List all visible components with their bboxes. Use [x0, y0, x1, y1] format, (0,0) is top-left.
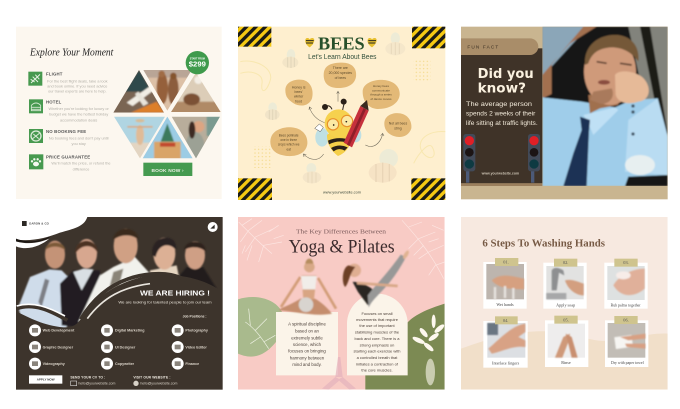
- price badge: START FROM: [190, 57, 205, 60]
- illustration: bee with pencil: [315, 99, 369, 156]
- hands decoration: [322, 357, 356, 390]
- fact bubble: sting: sting: [394, 126, 402, 130]
- step 04: 04.: [503, 318, 508, 323]
- text card: pilates: a controlled breath that: [357, 355, 398, 360]
- text card: yoga: [276, 312, 338, 375]
- photo triangle: statue and bag: [142, 116, 193, 159]
- icon: heart bee right: [368, 38, 377, 47]
- text card: yoga: based on an: [295, 329, 320, 334]
- heading: we are hiring: WE ARE HIRING !: [140, 288, 210, 297]
- feature: price guarantee: PRICE GUARANTEE: [46, 154, 90, 159]
- floral decoration: top corners: [239, 219, 445, 279]
- contact: website: VISIT OUR WEBSITE :: [133, 376, 171, 380]
- fact bubble: pollinate: one in three: [280, 138, 297, 142]
- heading: Did you know: Did you: [478, 67, 534, 82]
- text card: pilates: stabilising muscles of the: [355, 330, 400, 335]
- text card: yoga: A spiritual discipline: [288, 322, 326, 327]
- swoosh lines: [17, 274, 187, 320]
- fact bubble: dance: [363, 80, 400, 109]
- step 05: [545, 316, 588, 367]
- fact bubble: species: [324, 63, 356, 88]
- panel: Bees: [238, 27, 445, 200]
- panel: 6 steps to washing hands: [461, 217, 668, 390]
- fact bubble: pollinate: eat: [286, 147, 291, 151]
- contact: website: hello@yourwebsite.com: [140, 382, 177, 386]
- subheading: We are looking for talented people to join our team: [118, 299, 212, 304]
- step 05: 05.: [563, 317, 569, 322]
- header swoosh: [16, 217, 87, 248]
- photo: pilates woman: [343, 250, 410, 308]
- photo triangle: smiling woman: [171, 116, 222, 160]
- step 06: [605, 316, 648, 367]
- button: book now: [143, 163, 192, 176]
- panel: travel Explore Your Moment: [16, 27, 222, 199]
- photo triangle: luggage: [171, 74, 220, 112]
- feature: price guarantee: difference: [73, 167, 89, 171]
- feature: flight: [28, 71, 108, 93]
- step 04: [483, 316, 528, 368]
- heading: Explore Your Moment: Explore Your Moment: [29, 46, 114, 58]
- fact bubble: honey: food: [295, 99, 302, 103]
- fact bubble: species: 20,000 species: [329, 71, 352, 75]
- step 03: 03.: [623, 260, 629, 265]
- fact bubble: honey: [285, 80, 313, 106]
- website: www.yourwebsite.com: [481, 172, 519, 176]
- panel: Did you know fun fact: [461, 27, 668, 199]
- pill: fun fact: FUN FACT: [467, 45, 499, 50]
- contact: website: [133, 376, 177, 386]
- text card: yoga: extremely subtle: [291, 335, 323, 340]
- feature: price guarantee: We'll match the price, or refund the: [51, 162, 111, 166]
- pill: fun fact: [461, 38, 538, 55]
- step 04: Interlace fingers: [492, 361, 520, 366]
- feature: flight: FLIGHT: [46, 71, 63, 76]
- text card: yoga: mind and body.: [292, 362, 322, 367]
- feature: hotel: Whether you're looking for luxury or: [49, 107, 110, 111]
- button: book now: BOOK NOW ›: [152, 168, 184, 174]
- step 02: 02.: [563, 260, 568, 265]
- job list: Finance: [185, 362, 199, 366]
- photo: team: [18, 229, 217, 329]
- feature: hotel: accommodation deals: [60, 118, 97, 122]
- logo: [22, 221, 50, 226]
- fact text: The average person: [466, 101, 533, 108]
- text card: pilates: movements that require: [356, 317, 399, 322]
- icon: heart bee left: [305, 38, 314, 47]
- fact bubble: dance: through a series: [370, 93, 392, 97]
- heading: Did you know: know?: [478, 82, 526, 97]
- green blob left: [238, 297, 284, 357]
- job list: Photography: [185, 329, 209, 333]
- fact bubble: honey: winter: [294, 95, 304, 99]
- step 02: [543, 259, 587, 309]
- feature: flight: our travel experts are here to help.: [48, 89, 107, 93]
- heading: 6 Steps To Washing Hands: [482, 238, 605, 249]
- feature: hotel: budget we have the hottest holiday: [49, 113, 108, 117]
- website: www.yourwebsite.com: [323, 190, 361, 194]
- wave background: [461, 331, 668, 390]
- fact bubble: dance: communicate: [372, 88, 390, 92]
- icon: traffic light left: [463, 134, 475, 183]
- leaves on right blob: [412, 315, 445, 385]
- icon: traffic light right: [528, 134, 540, 183]
- feature: hotel: HOTEL: [46, 99, 62, 104]
- step 05: Rinse: [561, 360, 571, 365]
- heading: The Key Differences Between: [296, 229, 387, 236]
- step 01: [483, 258, 527, 309]
- text card: pilates: strong emphasis on: [360, 342, 394, 347]
- panel: We are hiring: [16, 217, 223, 390]
- photo triangle: couple: [144, 70, 190, 110]
- text card: pilates: initiates a contraction of: [356, 361, 399, 366]
- fact text: life sitting at traffic lights.: [466, 120, 538, 127]
- logo: GARON & CO: [29, 222, 50, 226]
- photo triangle: plane: [114, 70, 164, 113]
- job list: Digital Marketing: [115, 329, 144, 333]
- step 01: Wet hands: [496, 302, 514, 307]
- contact: email: SEND YOUR CV TO :: [70, 376, 105, 380]
- job list: UI Designer: [115, 345, 136, 349]
- button: apply now: APPLY NOW: [37, 378, 55, 382]
- text card: yoga: focuses on bringing: [288, 349, 326, 354]
- fact bubble: pollinate: Bees pollinate: [279, 133, 299, 137]
- step 06: 06.: [623, 318, 629, 323]
- subheading: Let's Learn About Bees: [308, 54, 377, 61]
- feature: no booking fee: you stay: [72, 142, 86, 146]
- text card: pilates: starting each exercise with: [354, 349, 400, 354]
- heading: BEES: [305, 34, 377, 54]
- job list: [29, 324, 209, 370]
- hazard stripes: corners: [238, 27, 445, 200]
- photo: yoga woman: [279, 259, 336, 315]
- text card: pilates: the use of important: [359, 323, 395, 328]
- fact bubble: pollinate: [270, 127, 307, 156]
- button: apply now: [29, 375, 62, 384]
- job list: Graphic Designer: [43, 345, 74, 349]
- fact bubble: honey: bees': [295, 90, 303, 94]
- fact bubble: honey: Honey is: [292, 85, 306, 89]
- job list: Web Development: [43, 329, 75, 333]
- contact: email: hello@yourwebsite.com: [78, 382, 115, 386]
- corner icon: [208, 222, 218, 232]
- step 03: [604, 259, 648, 309]
- job positions label: Job Positions :: [183, 315, 207, 319]
- photo triangle: beach woman: [113, 116, 167, 159]
- job list: Copywriter: [115, 362, 135, 366]
- feature: no booking fee: [29, 129, 109, 146]
- job list: Video Editor: [185, 345, 207, 349]
- olive blob right: [365, 304, 445, 390]
- decorative dots and squiggles: [240, 59, 445, 168]
- text card: pilates: back and core. There is a: [355, 336, 400, 341]
- fact bubble: dance: Honey bees: [373, 84, 389, 88]
- text card: yoga: harmony between: [290, 355, 325, 360]
- text card: yoga: science, which: [293, 342, 322, 347]
- step 03: Rub palms together: [611, 303, 641, 307]
- fact bubble: species: There are: [333, 66, 348, 70]
- arrows: [303, 91, 384, 159]
- text card: pilates: the core muscles.: [361, 368, 393, 373]
- fact text: spends 2 weeks of their: [466, 111, 535, 118]
- leaves on left blob: [245, 309, 275, 349]
- feature: flight: and book online. If you need advice: [47, 84, 107, 88]
- contact: email: [70, 376, 115, 386]
- fact bubble: pollinate: crops which we: [278, 143, 300, 147]
- heading: BEES: BEES: [318, 34, 365, 54]
- fact bubble: species: of bees: [335, 76, 346, 80]
- fact bubble: sting: Not all bees: [389, 121, 407, 125]
- feature: flight: For the best flight deals, take a look: [47, 79, 108, 83]
- feature: price guarantee: [29, 154, 111, 171]
- text card: pilates: Focuses on small: [361, 311, 393, 316]
- panel: Yoga and Pilates: [238, 217, 445, 390]
- feature: no booking fee: NO BOOKING FEE: [46, 129, 86, 134]
- fact bubble: sting: [384, 113, 411, 137]
- title: Yoga & Pilates: Yoga & Pilates: [289, 236, 395, 257]
- feature: hotel: [29, 99, 110, 122]
- price badge: [186, 51, 209, 74]
- photo: tired man in car: [542, 27, 668, 186]
- step 06: Dry with paper towel: [611, 361, 644, 365]
- heading: Did you know: [478, 67, 534, 97]
- decorative faded bees: [265, 32, 405, 183]
- step 02: Apply soap: [556, 302, 575, 307]
- text card: pilates: [347, 294, 408, 375]
- text panel background: [461, 48, 542, 183]
- fact text: [466, 101, 538, 127]
- job list: Videography: [43, 362, 66, 366]
- price badge: $299: [189, 60, 206, 69]
- feature: no booking fee: No booking fees and don't pay until: [49, 136, 109, 140]
- step 01: 01.: [503, 260, 509, 265]
- fact bubble: dance: of dance moves: [370, 97, 392, 101]
